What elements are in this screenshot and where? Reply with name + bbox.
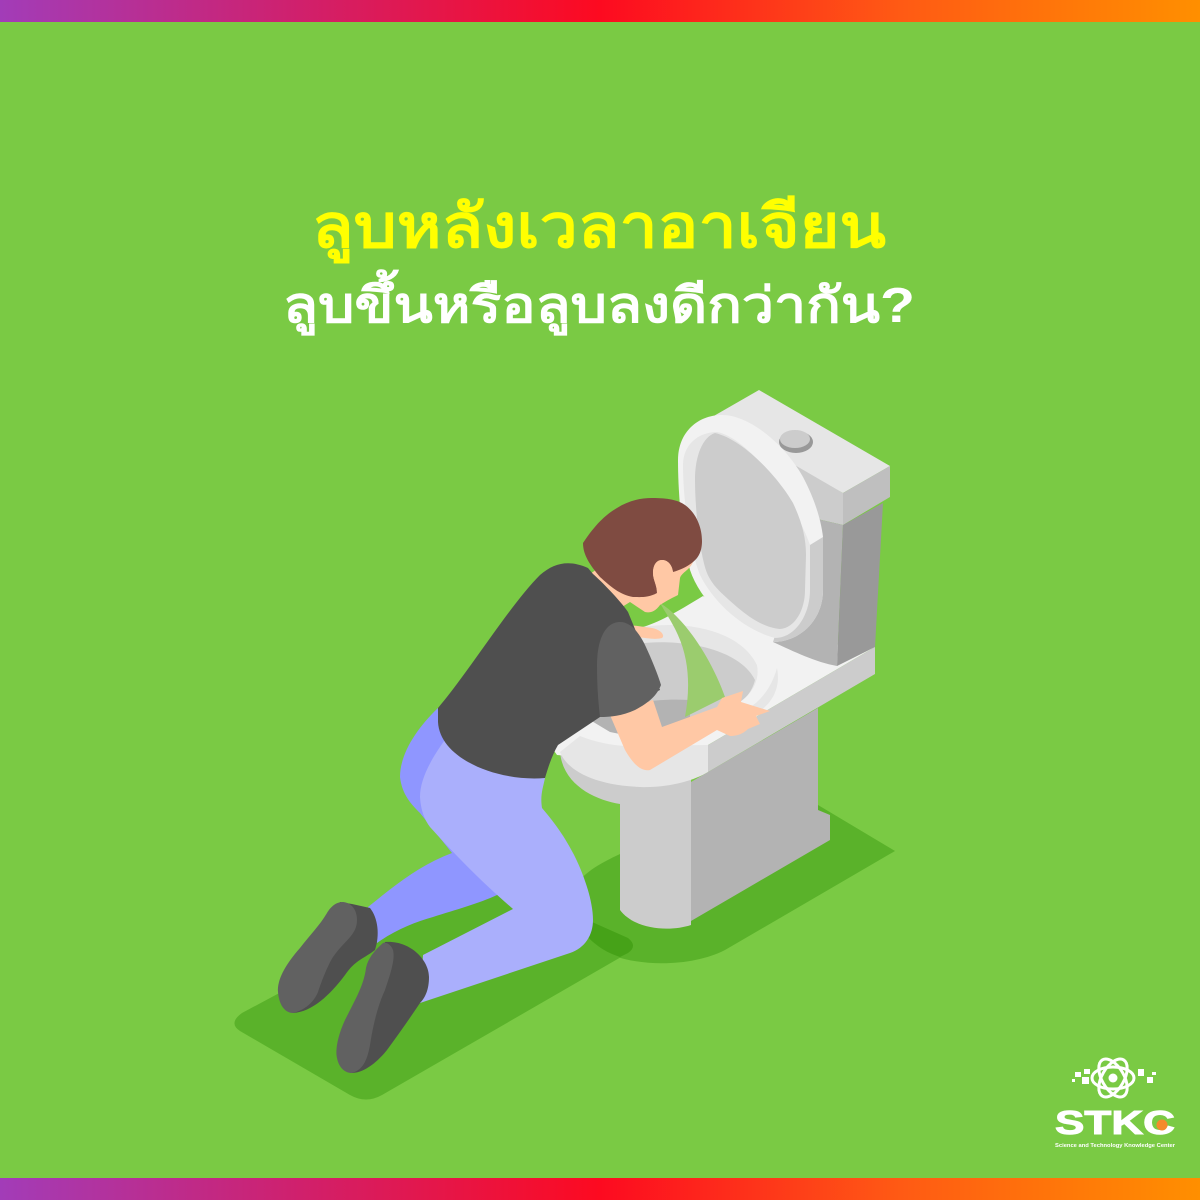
bowl rim and interior xyxy=(590,625,758,738)
toilet deck front edge xyxy=(708,647,875,772)
toilet bowl underside xyxy=(560,752,691,804)
arm and hand xyxy=(610,691,770,770)
STKC logo xyxy=(1055,1054,1176,1149)
logo: atom icon xyxy=(1092,1054,1134,1102)
shirt xyxy=(438,563,660,778)
logo: orange dot xyxy=(1156,1120,1168,1130)
toilet tank xyxy=(712,390,890,666)
logo: pixel squares xyxy=(1072,1069,1156,1084)
title: ลูบขึ้นหรือลูบลงดีกว่ากัน? xyxy=(283,269,915,336)
person xyxy=(278,498,770,1073)
shirt sleeve xyxy=(597,622,661,717)
title: ลูบหลังเวลาอาเจียน xyxy=(312,193,886,264)
ear xyxy=(653,560,673,593)
front leg xyxy=(420,737,593,1003)
back shoe xyxy=(278,902,378,1013)
vomit stream xyxy=(660,603,725,717)
toilet lid xyxy=(678,415,823,642)
front shoe xyxy=(336,942,429,1073)
flush button xyxy=(779,430,813,453)
logo: tagline: Science and Technology Knowledge Center xyxy=(1055,1143,1176,1149)
bottom gradient bar xyxy=(0,1178,1200,1200)
floor shadows xyxy=(234,805,895,1100)
far hand xyxy=(630,625,663,639)
toilet deck xyxy=(550,596,875,762)
toilet pedestal xyxy=(620,708,830,929)
title xyxy=(283,193,915,336)
toilet bowl front xyxy=(560,736,708,787)
hair xyxy=(583,498,702,597)
back leg xyxy=(368,708,520,943)
logo: wordmark: STKC xyxy=(1055,1104,1175,1141)
toilet xyxy=(550,390,890,929)
top gradient bar xyxy=(0,0,1200,22)
seat flap xyxy=(693,617,778,714)
neck and face xyxy=(590,555,693,612)
